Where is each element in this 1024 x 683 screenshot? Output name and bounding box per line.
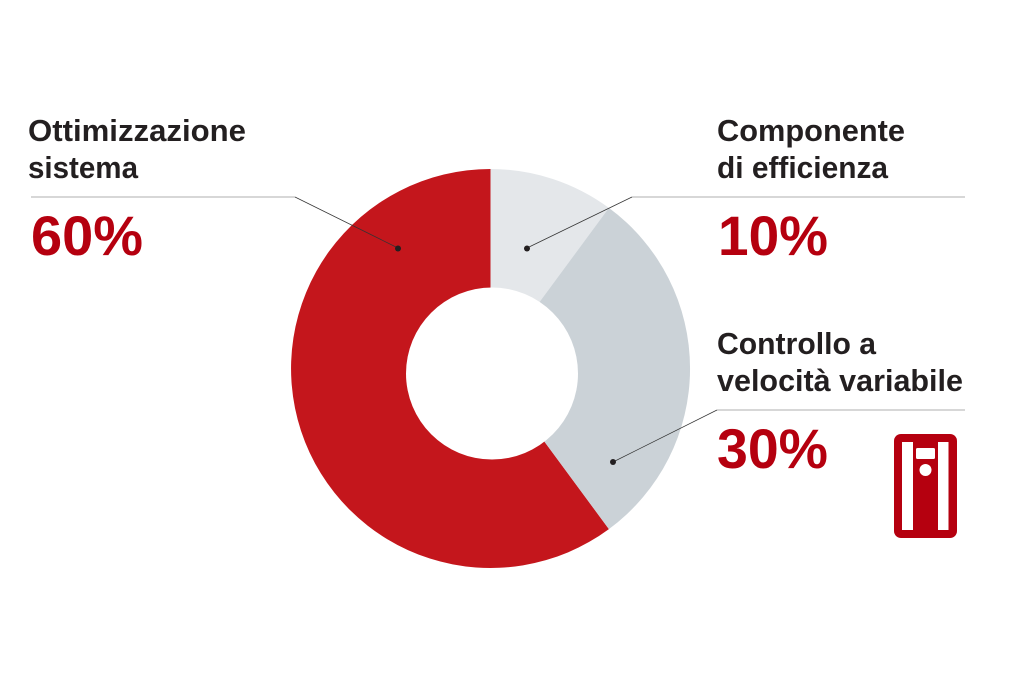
label: ottimizzazione sistema [28,113,246,185]
icon: variable speed drive [894,434,957,538]
leader line: 60% [31,197,401,252]
label: componente di efficienza: Componente [717,113,905,148]
label: ottimizzazione sistema: Ottimizzazione [28,113,246,148]
leader line: 10% [524,197,965,252]
label: controllo a velocità variabile: velocità variabile [717,363,963,398]
value: 10%: 10% [718,204,828,267]
donut chart [291,169,690,568]
label: componente di efficienza [717,113,905,185]
label: ottimizzazione sistema: sistema [28,150,139,185]
donut hole [406,288,578,460]
segment: controllo a velocità variabile 30% [490,208,690,529]
leader line: 30% [610,410,965,465]
value: 60%: 60% [31,204,143,267]
segment: componente di efficienza 10% [490,169,609,368]
label: componente di efficienza: di efficienza [717,150,889,185]
label: controllo a velocità variabile: Controllo a [717,326,877,361]
label: controllo a velocità variabile [717,326,963,398]
segment: ottimizzazione sistema 60% [291,169,609,568]
value: 30%: 30% [717,417,828,480]
